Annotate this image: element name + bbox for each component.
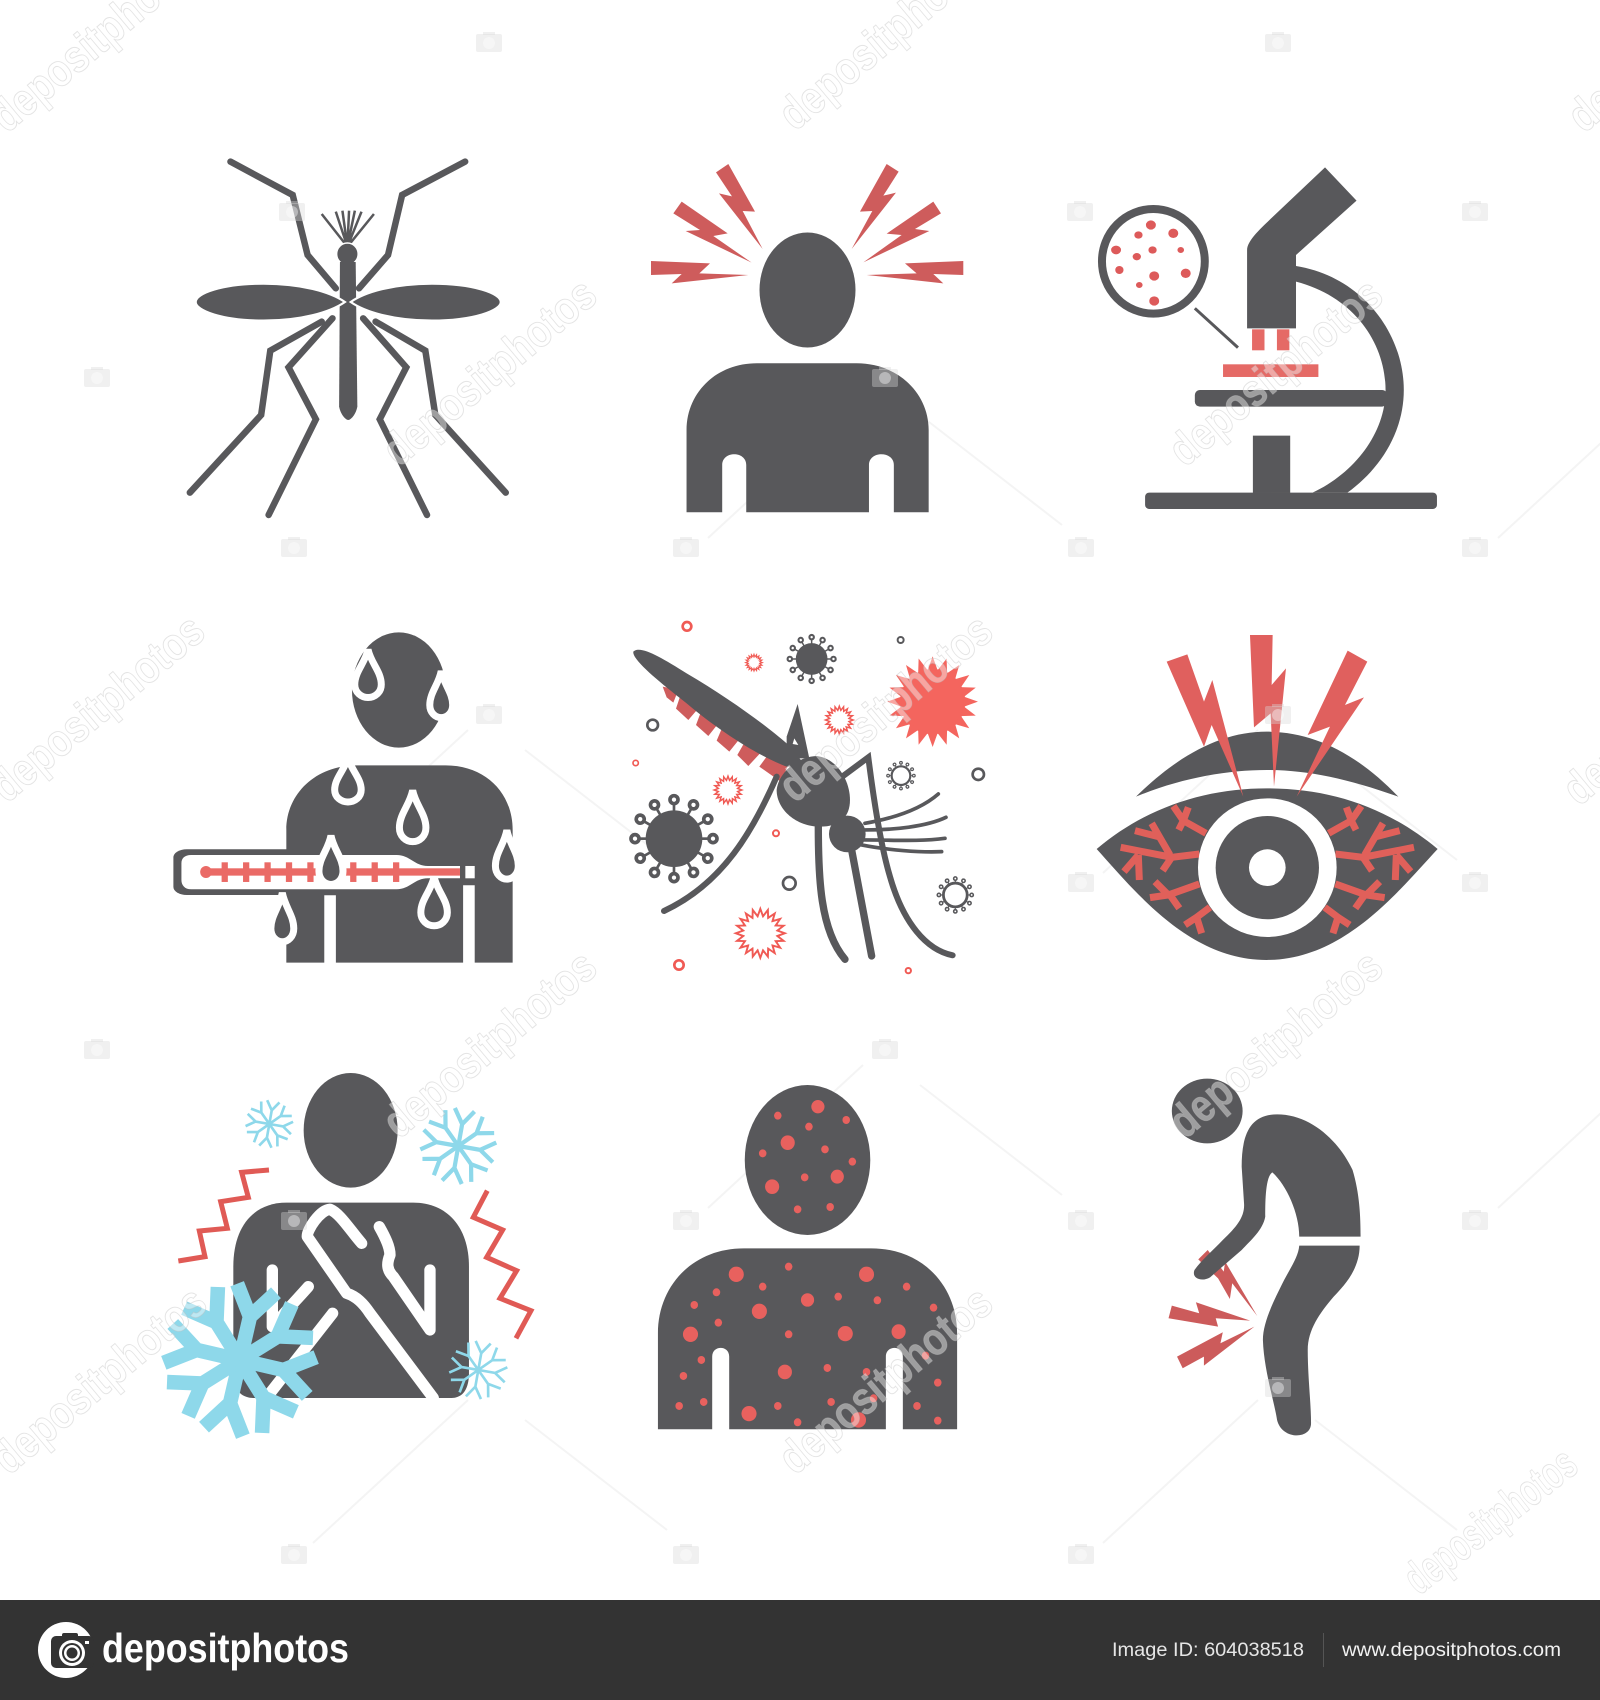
outline virus lower <box>937 877 973 913</box>
lower snowflake <box>446 1337 511 1403</box>
footer logo mark <box>38 1622 94 1678</box>
magnified red cells <box>1111 220 1191 306</box>
large snowflake <box>152 1272 328 1448</box>
head <box>745 1085 870 1235</box>
solid red burst <box>887 656 978 747</box>
magnifier lens <box>1102 209 1205 314</box>
thorax <box>777 756 850 827</box>
watermark overlay: depositphotos <box>768 1275 1002 1484</box>
head <box>1172 1079 1243 1143</box>
crossed arms <box>270 1209 433 1398</box>
icon: rash person <box>658 1085 957 1429</box>
torso <box>233 1203 469 1398</box>
pain bolts <box>1167 635 1367 797</box>
red wing stripes <box>663 687 788 782</box>
head <box>352 632 446 748</box>
watermark overlay: depositphotos <box>372 267 606 476</box>
dark virus small <box>788 635 836 683</box>
watermark overlay: depositphotos <box>1158 939 1392 1148</box>
eyelid <box>1136 732 1398 797</box>
head <box>829 816 866 852</box>
mosquito head <box>337 243 358 265</box>
mosquito body <box>339 262 357 420</box>
sweat drops <box>271 649 518 942</box>
eye shape <box>1097 788 1438 960</box>
iris <box>1198 798 1337 937</box>
icon: mosquito top view <box>190 162 506 515</box>
microscope base <box>1145 493 1437 509</box>
torso <box>658 1248 957 1429</box>
leg <box>1263 1246 1360 1435</box>
thermometer casing <box>173 849 303 895</box>
watermark overlay: depositphotos <box>372 939 606 1148</box>
microscope post <box>1253 436 1290 493</box>
mosquito antennae <box>230 162 465 288</box>
watermark cameras <box>84 32 1488 1564</box>
shiver zigzags <box>178 1170 531 1338</box>
dark virus large <box>631 796 717 882</box>
medium snowflake <box>416 1103 501 1189</box>
icon: mosquito with viruses <box>631 622 984 973</box>
mosquito plume <box>322 211 374 247</box>
microscope tube <box>1247 167 1357 328</box>
wing <box>633 650 807 767</box>
blood vessels <box>1121 806 1414 933</box>
microscope stage <box>1195 390 1387 407</box>
thermometer glass <box>181 855 460 889</box>
torso <box>286 765 513 963</box>
red sample pieces <box>1223 329 1318 377</box>
small rings <box>633 622 984 973</box>
icon: headache person <box>651 164 963 512</box>
footer bar <box>0 1600 1600 1700</box>
hind leg <box>840 757 953 955</box>
microscope arm <box>1296 266 1404 493</box>
upper body and arm <box>1194 1114 1361 1280</box>
pain bolts <box>1169 1250 1257 1368</box>
footer logo wordmark: depositphotos <box>102 1625 349 1671</box>
front legs <box>818 827 872 959</box>
icon: red eye <box>1097 635 1438 960</box>
icon: person with knee pain <box>1169 1079 1361 1435</box>
pain bolts <box>651 164 963 283</box>
icon: microscope <box>1102 167 1437 509</box>
watermark overlay: depositphotos <box>1158 267 1392 476</box>
head <box>760 232 856 348</box>
icon: sweating person with thermometer <box>173 632 518 963</box>
mosquito left wing <box>196 284 345 321</box>
mosquito right wing <box>351 284 501 321</box>
watermark overlay: depositphotos <box>768 603 1002 812</box>
icon: chills person <box>152 1073 531 1448</box>
pointer line <box>1195 308 1238 348</box>
outline virus upper <box>887 761 915 790</box>
faint watermark lattice <box>313 395 1600 1543</box>
small snowflake <box>243 1097 296 1151</box>
rear leg <box>664 777 777 911</box>
red ring bursts <box>712 653 855 961</box>
mosquito legs <box>190 318 506 515</box>
image id: Image ID: 604038518 <box>1112 1639 1304 1661</box>
head <box>304 1073 398 1188</box>
whiskers <box>862 794 946 852</box>
torso <box>687 363 929 512</box>
website url: www.depositphotos.com <box>1341 1639 1561 1661</box>
rash spots <box>675 1100 942 1428</box>
thorax spike <box>787 704 809 758</box>
thermometer mercury <box>200 862 460 882</box>
